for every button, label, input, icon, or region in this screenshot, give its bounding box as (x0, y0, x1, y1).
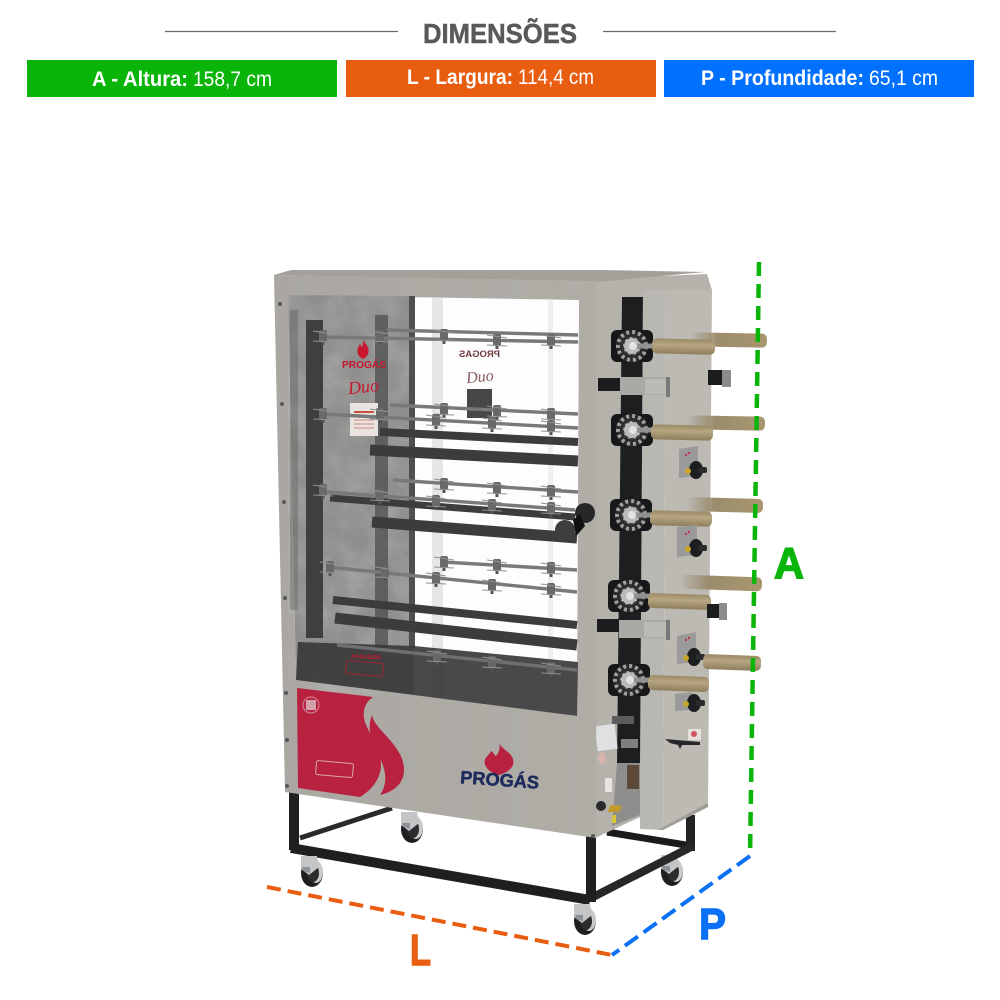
badge: profundidade: P - Profundidade: (701, 67, 864, 90)
drive rosettes (608, 330, 654, 696)
title: DIMENSÕES (423, 18, 577, 49)
side column (640, 290, 712, 830)
dark lower glass (296, 642, 578, 716)
glass window (288, 295, 579, 716)
badge: altura (27, 60, 337, 97)
lower rear handle (703, 654, 761, 671)
rotisserie cabinet (274, 270, 767, 838)
black drive strip (617, 297, 643, 765)
stand and casters (289, 790, 695, 935)
glass window: Duo (464, 367, 495, 387)
red panel with flame (297, 688, 404, 797)
front face (274, 275, 597, 838)
badge: profundidade: 65,1 cm (869, 67, 938, 90)
frame rivets (278, 302, 595, 838)
badge: altura: A - Altura: (92, 68, 188, 91)
control knobs (675, 446, 707, 712)
badge: largura: 114,4 cm (518, 66, 594, 89)
logo reflection: PROGAS (459, 349, 500, 359)
brand logo: PROGÁS (460, 766, 540, 793)
badge: profundidade (664, 60, 974, 97)
front spit handles (648, 338, 715, 692)
logo on glass: Duo (346, 375, 380, 398)
brackets (597, 370, 731, 640)
top lid (274, 270, 705, 282)
logo on glass: PROGÁS (342, 358, 386, 371)
door handle (555, 503, 595, 540)
label A: A (774, 539, 804, 588)
badge: largura: L - Largura: (407, 66, 513, 89)
badge: altura: 158,7 cm (193, 68, 272, 91)
spits (323, 330, 578, 670)
side panel (595, 274, 712, 838)
brand logo (460, 743, 540, 793)
dimension line: largura (267, 887, 612, 955)
rear spit handles (680, 332, 767, 591)
lever and sticker (665, 729, 701, 749)
badge: largura (346, 60, 656, 97)
label L: L (410, 926, 431, 975)
heating bars (330, 432, 578, 645)
burner and gas assembly (594, 716, 640, 826)
dimension line: profundidade (612, 856, 750, 955)
warning label (350, 403, 378, 436)
logo on glass (342, 339, 386, 398)
glass window: ASSADOR (351, 654, 382, 662)
dimension line: altura (750, 262, 759, 856)
label P: P (699, 900, 726, 949)
